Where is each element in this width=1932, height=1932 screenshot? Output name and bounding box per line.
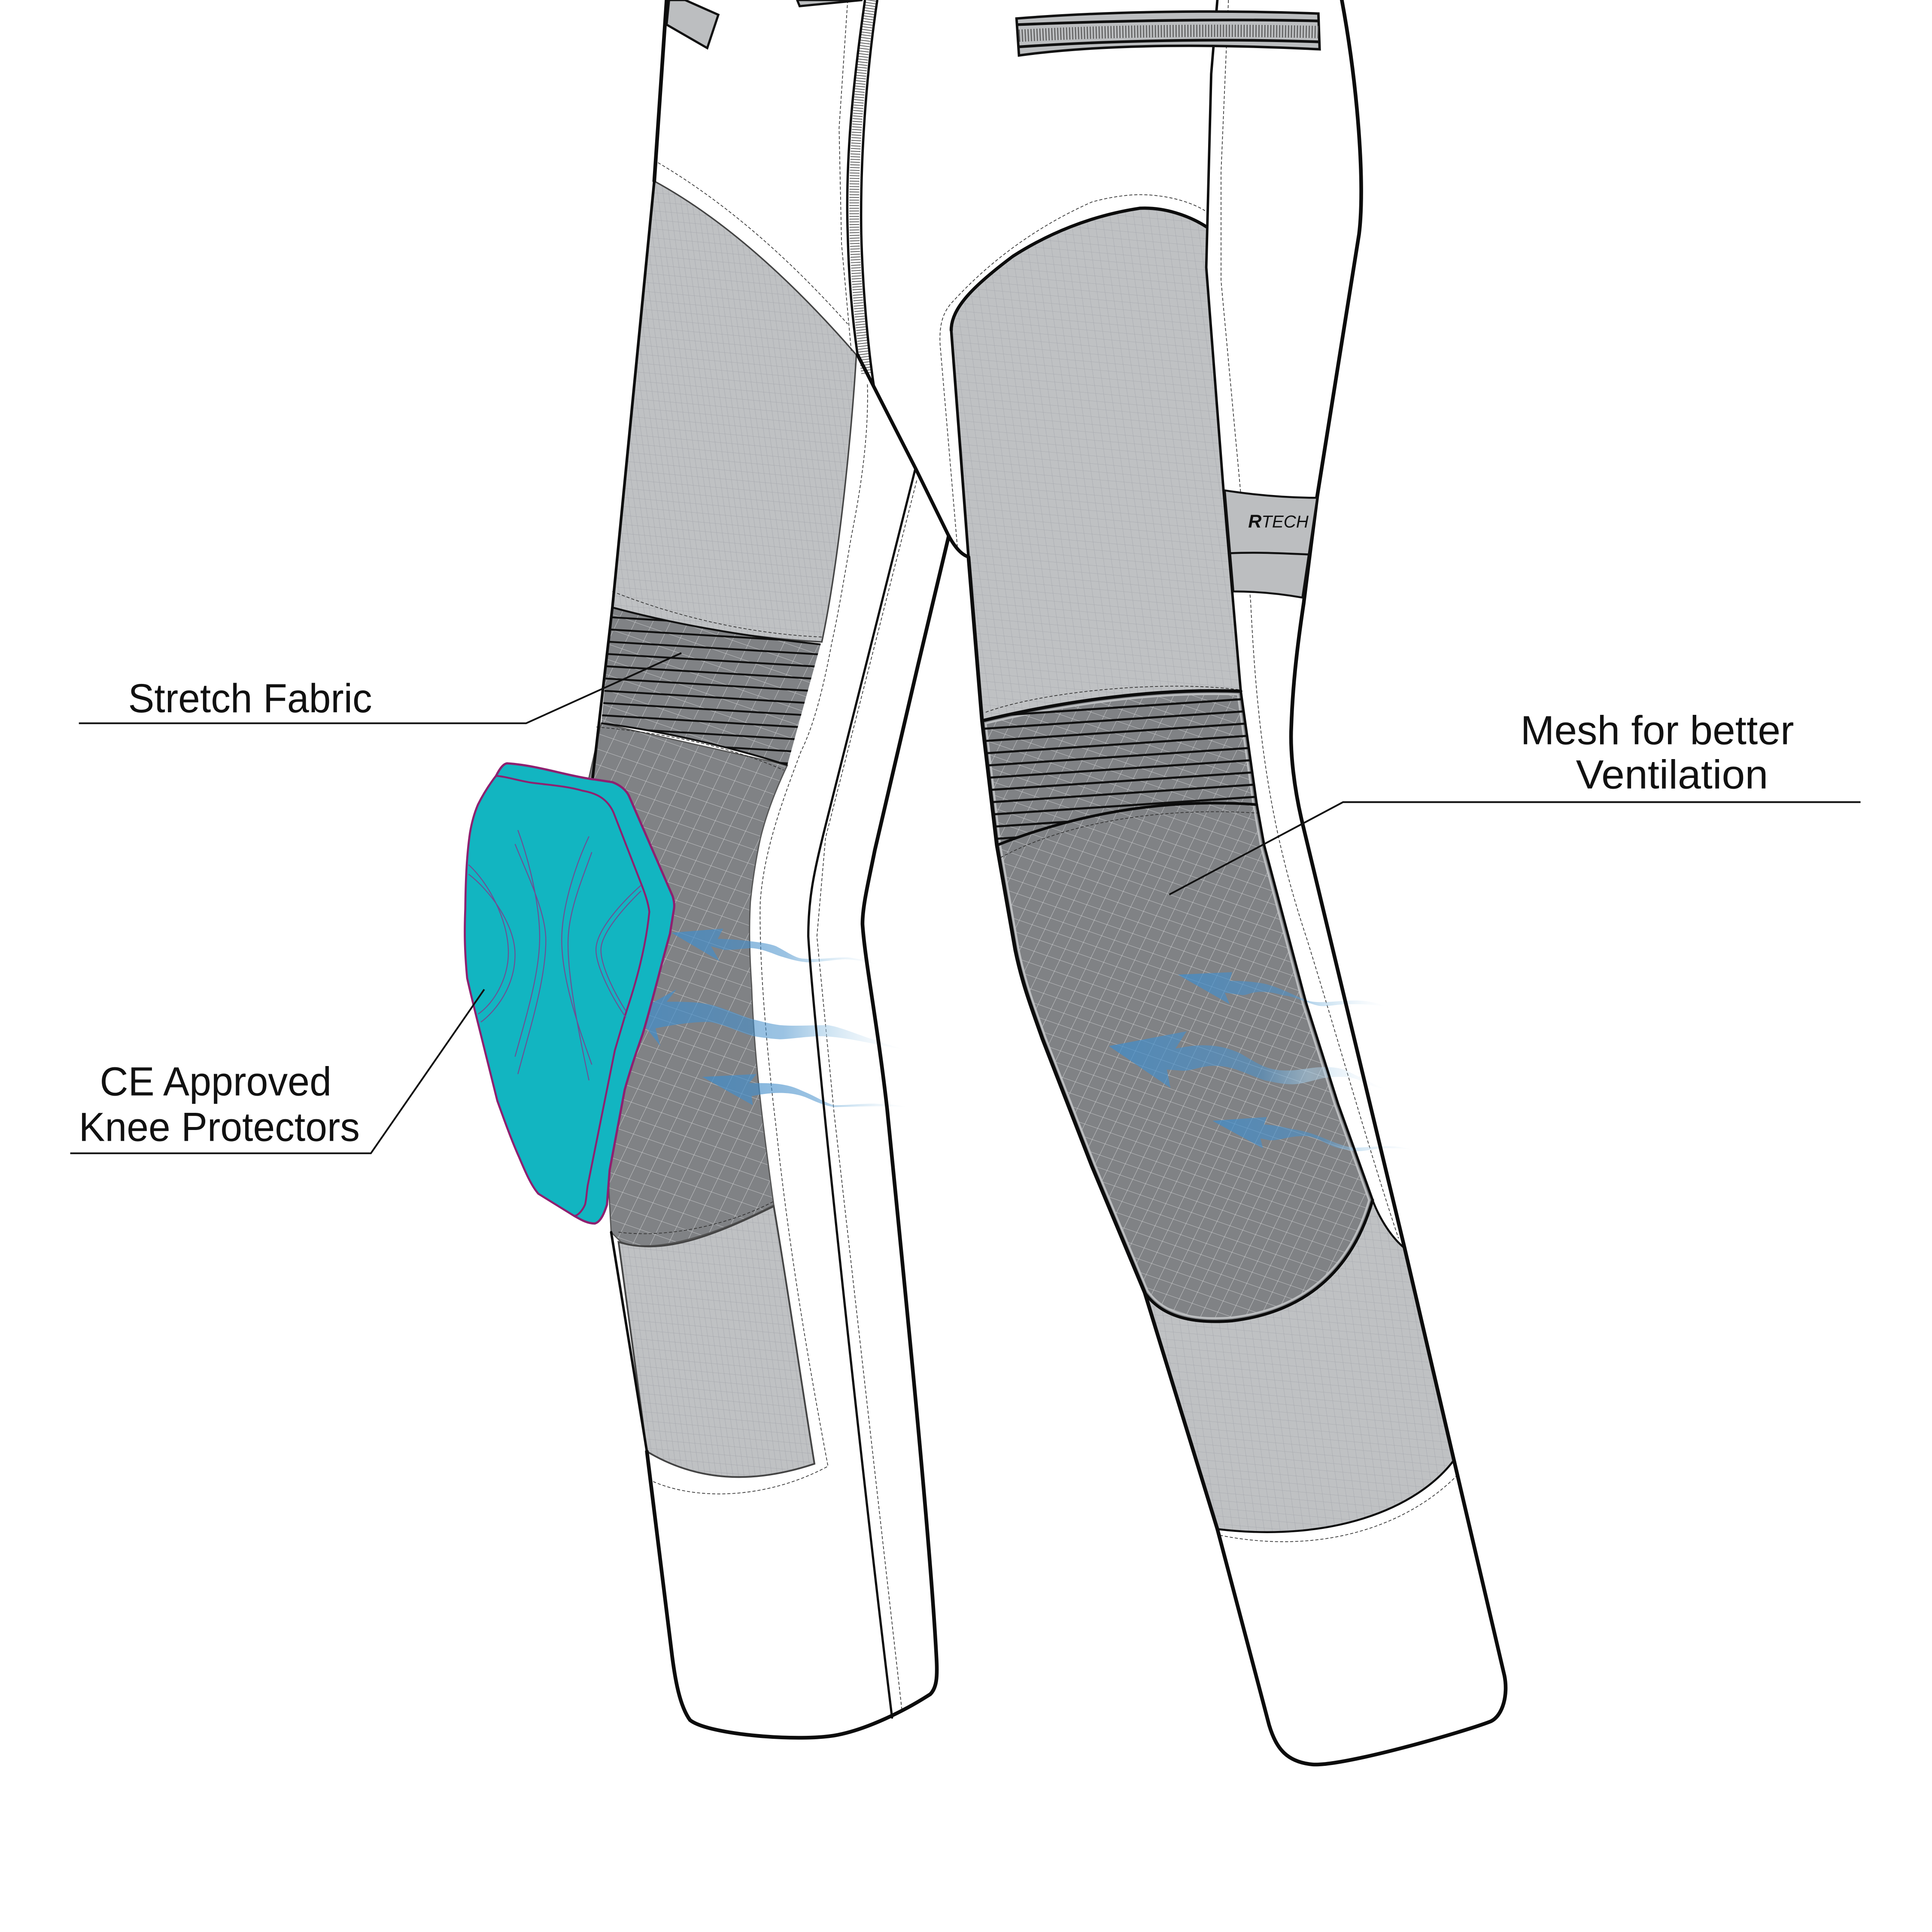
panel: right stretch fabric lines: [985, 698, 1255, 840]
logo patch with RTECH: [1225, 490, 1317, 598]
zipper: [847, 0, 877, 388]
protector crease lines: [468, 830, 641, 1080]
arrow group: left leg airflow: [635, 929, 909, 1108]
arrow: airflow middle right: [1109, 1031, 1386, 1089]
arrow: airflow top right: [1178, 972, 1386, 1007]
arrow: airflow bottom left: [702, 1074, 909, 1108]
leader line: stretch fabric: [79, 653, 681, 723]
belt loop left: [667, 0, 718, 48]
left leg outline: [592, 0, 969, 1738]
callout: stretch fabric: [79, 653, 681, 723]
panel: right shin mesh: [1145, 1200, 1454, 1532]
callout: mesh ventilation: [1170, 708, 1861, 895]
belt strap with elastic: [1017, 12, 1320, 55]
panel: right thigh mesh: [951, 208, 1241, 721]
label: mesh ventilation: Ventilation: [1576, 752, 1768, 798]
arrow: airflow middle left: [635, 990, 905, 1050]
icon: knee protector: [465, 763, 674, 1224]
stitching: dashed seams: [596, 0, 1456, 1710]
panel: right knee ventilation mesh: [982, 691, 1373, 1321]
arrow: airflow top left: [671, 929, 880, 966]
protector back shell: [465, 763, 674, 1224]
panel: left knee ventilation mesh: [586, 723, 787, 1246]
callout: knee protectors: [70, 990, 484, 1153]
leader line: mesh ventilation: [1170, 802, 1861, 895]
leader line: knee protectors: [70, 990, 484, 1153]
panel: left leg thigh mesh: [612, 181, 857, 642]
panel: left shin mesh: [619, 1206, 814, 1477]
waistband tab: [797, 0, 863, 6]
logo text: RTECH: [1248, 511, 1309, 532]
label: stretch fabric: Stretch Fabric: [128, 676, 372, 721]
label: knee protectors: CE Approved: [100, 1059, 331, 1104]
arrow: airflow bottom right: [1212, 1117, 1415, 1151]
protector front face: [465, 776, 649, 1216]
right leg outline: [951, 0, 1506, 1765]
arrow group: right leg airflow: [1109, 972, 1415, 1151]
label: mesh ventilation: Mesh for better: [1520, 708, 1794, 753]
panel: left stretch fabric band: [601, 607, 821, 766]
label: knee protectors: Knee Protectors: [79, 1105, 360, 1150]
